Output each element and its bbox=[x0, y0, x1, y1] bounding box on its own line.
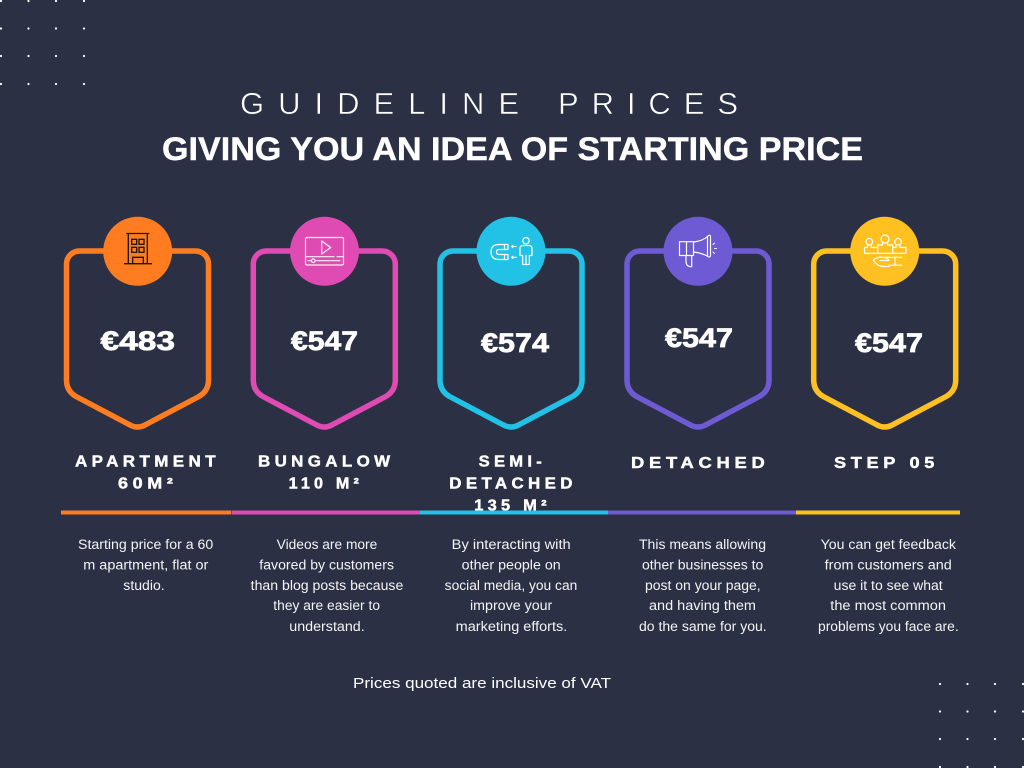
heading: apartment: APARTMENT bbox=[75, 454, 220, 470]
shield outline: semi-detached bbox=[440, 251, 582, 427]
description: detached bbox=[639, 537, 767, 634]
shield outline: detached bbox=[627, 251, 769, 427]
heading: step 05: STEP 05 bbox=[834, 455, 939, 472]
subtitle: GIVING YOU AN IDEA OF STARTING PRICE bbox=[162, 131, 863, 167]
description: apartment: studio. bbox=[123, 578, 165, 593]
icon: magnet attracting person bbox=[476, 217, 546, 286]
description: step 05 bbox=[818, 537, 959, 634]
price: bungalow: €547 bbox=[291, 326, 358, 356]
description: step 05: from customers and bbox=[825, 558, 952, 572]
description: semi-detached: other people on bbox=[462, 558, 561, 572]
heading: semi-detached: 135 M² bbox=[474, 498, 551, 514]
heading: bungalow: 110 M² bbox=[289, 476, 363, 492]
heading: apartment bbox=[75, 454, 220, 492]
divider line: five colour segments bbox=[61, 510, 960, 514]
description: bungalow: favored by customers bbox=[259, 558, 394, 572]
description: step 05: the most common bbox=[830, 598, 946, 613]
description: apartment: m apartment, flat or bbox=[83, 558, 209, 572]
price: detached: €547 bbox=[665, 323, 733, 353]
price: semi-detached: €574 bbox=[481, 328, 549, 358]
heading: detached: DETACHED bbox=[631, 455, 770, 472]
heading: semi-detached: SEMI- bbox=[479, 454, 546, 470]
description: apartment bbox=[78, 537, 213, 593]
description: step 05: You can get feedback bbox=[821, 537, 956, 552]
description: bungalow: they are easier to bbox=[273, 598, 380, 613]
title: GUIDELINE bbox=[240, 86, 519, 121]
description: step 05: problems you face are. bbox=[818, 619, 959, 634]
description: step 05: use it to see what bbox=[834, 578, 943, 593]
heading: bungalow: BUNGALOW bbox=[258, 454, 394, 470]
description: semi-detached: marketing efforts. bbox=[456, 619, 567, 634]
description: semi-detached: By interacting with bbox=[452, 537, 571, 552]
price: step 05: €547 bbox=[855, 328, 923, 358]
description: detached: and having them bbox=[649, 598, 756, 613]
panel: detached bbox=[627, 217, 770, 634]
price: apartment: €483 bbox=[100, 326, 175, 356]
panel: apartment bbox=[66, 217, 220, 593]
title bbox=[240, 86, 738, 121]
description: detached: do the same for you. bbox=[639, 619, 767, 634]
icon: megaphone bbox=[664, 217, 732, 286]
heading: bungalow bbox=[258, 454, 394, 492]
description: detached: post on your page, bbox=[645, 578, 761, 593]
footnote: Prices quoted are inclusive of VAT bbox=[353, 675, 611, 692]
icon: building bbox=[103, 217, 172, 286]
description: bungalow: than blog posts because bbox=[251, 578, 403, 593]
description: semi-detached: improve your bbox=[470, 598, 553, 613]
icon: customers on a hand bbox=[850, 217, 919, 286]
description: semi-detached bbox=[445, 537, 577, 634]
description: detached: other businesses to bbox=[642, 558, 763, 572]
description: apartment: Starting price for a 60 bbox=[78, 537, 213, 552]
heading: semi-detached: DETACHED bbox=[449, 476, 577, 492]
panel: bungalow bbox=[251, 217, 403, 634]
description: detached: This means allowing bbox=[639, 537, 766, 552]
description: bungalow: understand. bbox=[289, 619, 365, 634]
shield outline: bungalow bbox=[253, 251, 395, 427]
panel: step 05 bbox=[814, 217, 959, 634]
description: bungalow bbox=[251, 537, 403, 634]
title: PRICES bbox=[558, 86, 738, 121]
description: bungalow: Videos are more bbox=[277, 537, 377, 552]
shield outline: apartment bbox=[66, 251, 208, 427]
heading: apartment: 60M² bbox=[118, 476, 178, 492]
icon: video player bbox=[290, 217, 359, 286]
panel: semi-detached bbox=[440, 217, 582, 634]
heading: semi-detached bbox=[449, 454, 577, 514]
description: semi-detached: social media, you can bbox=[445, 578, 577, 593]
shield outline: step 05 bbox=[814, 251, 956, 427]
